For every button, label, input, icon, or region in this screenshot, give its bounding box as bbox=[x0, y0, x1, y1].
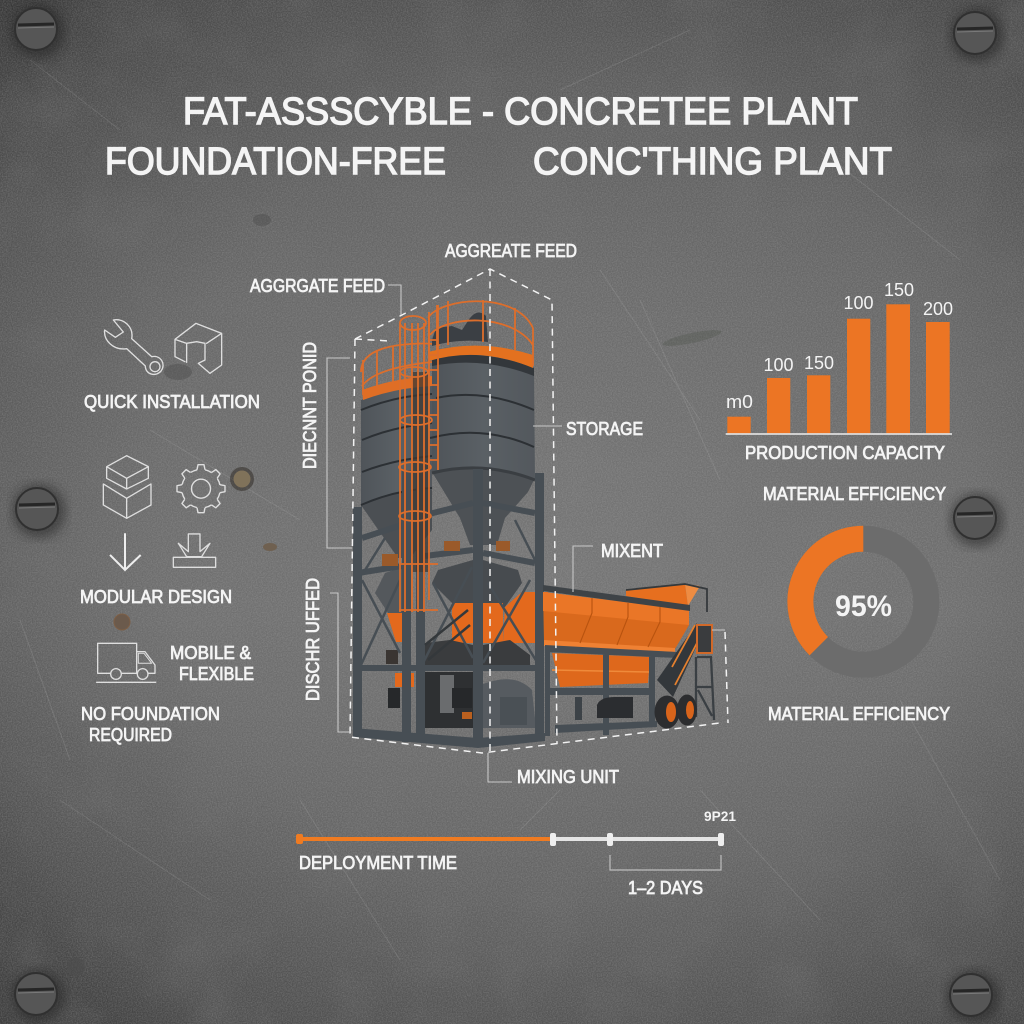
end label: 9P21 bbox=[704, 808, 736, 824]
donut orange segment bbox=[800, 539, 863, 646]
bar value labels: m0 bbox=[726, 392, 753, 412]
donut ring bbox=[800, 539, 926, 665]
lower hoppers bbox=[375, 560, 522, 613]
callout: vertical dischr uffed: DISCHR UFFED bbox=[303, 578, 323, 701]
deployment label: DEPLOYMENT TIME bbox=[299, 853, 457, 873]
start node bbox=[296, 834, 303, 844]
title bbox=[105, 91, 892, 183]
bar value labels: 150 bbox=[804, 353, 834, 373]
bar chart: production capacity bbox=[726, 280, 953, 463]
label: quick installation: QUICK INSTALLATION bbox=[84, 392, 260, 412]
bar value labels: 200 bbox=[923, 299, 953, 319]
label: no foundation required bbox=[81, 704, 220, 745]
right silo bbox=[428, 300, 535, 545]
panel: concrete plant illustration bbox=[250, 241, 728, 787]
label: mobile and flexible: FLEXIBLE bbox=[179, 664, 254, 684]
icon: truck bbox=[97, 643, 156, 682]
timeline: deployment time bbox=[296, 808, 736, 898]
leader lines bbox=[327, 285, 725, 782]
panel: left feature list bbox=[80, 320, 260, 745]
label: modular design: MODULAR DESIGN bbox=[80, 587, 232, 607]
icon: gear bbox=[177, 465, 225, 513]
dashed bounding outline bbox=[350, 269, 728, 753]
duration label: 1–2 DAYS bbox=[628, 878, 703, 898]
label: no foundation required: NO FOUNDATION bbox=[81, 704, 220, 724]
upper feed hopper bbox=[626, 584, 707, 612]
icon: arrow into foundation bbox=[173, 534, 216, 567]
title: FOUNDATION-FREE bbox=[105, 141, 446, 183]
chart label: PRODUCTION CAPACITY bbox=[745, 443, 945, 463]
caged ladder bbox=[399, 305, 438, 612]
heading: MATERIAL EFFICIENCY bbox=[763, 484, 946, 504]
stairs and wheels bbox=[654, 623, 714, 728]
bar value labels: 100 bbox=[763, 355, 794, 375]
orange track bbox=[298, 837, 551, 841]
bar value labels: 150 bbox=[884, 280, 914, 300]
timeline nodes bbox=[550, 833, 724, 846]
icon: down arrow bbox=[110, 533, 141, 570]
donut value: 95% bbox=[835, 590, 892, 623]
white track bbox=[550, 837, 721, 841]
bracket bbox=[610, 855, 721, 870]
left silo bbox=[361, 344, 440, 558]
callout: vertical diecnnt ponid: DIECNNT PONID bbox=[300, 342, 320, 469]
label: mobile and flexible bbox=[170, 643, 254, 684]
orange hopper blocks bbox=[387, 592, 548, 690]
bars bbox=[727, 304, 950, 433]
callout: storage: STORAGE bbox=[566, 419, 643, 439]
caption: MATERIAL EFFICIENCY bbox=[768, 704, 950, 724]
rust rivets bbox=[67, 467, 277, 976]
donut chart: material efficiency bbox=[763, 484, 950, 724]
callout: mixent: MIXENT bbox=[601, 541, 663, 561]
icons: wrench and folded box bbox=[105, 320, 222, 374]
mixing machinery bbox=[386, 640, 536, 728]
icons: stacked cubes bbox=[103, 456, 151, 518]
mixer hopper bbox=[543, 585, 690, 736]
bar value labels: 100 bbox=[843, 293, 874, 313]
axis baseline bbox=[726, 433, 952, 435]
bar value labels bbox=[726, 280, 953, 412]
steel frame bbox=[353, 469, 545, 748]
label: mobile and flexible: MOBILE & bbox=[170, 643, 251, 663]
callout: aggregate feed top: AGGREATE FEED bbox=[445, 241, 577, 261]
label: no foundation required: REQUIRED bbox=[89, 725, 172, 745]
title: FAT-ASSSCYBLE - CONCRETEE PLANT bbox=[183, 91, 858, 133]
callout: aggregate feed left: AGGRGATE FEED bbox=[250, 276, 385, 296]
callout: mixing unit: MIXING UNIT bbox=[517, 767, 619, 787]
title: CONC'THING PLANT bbox=[533, 141, 892, 183]
